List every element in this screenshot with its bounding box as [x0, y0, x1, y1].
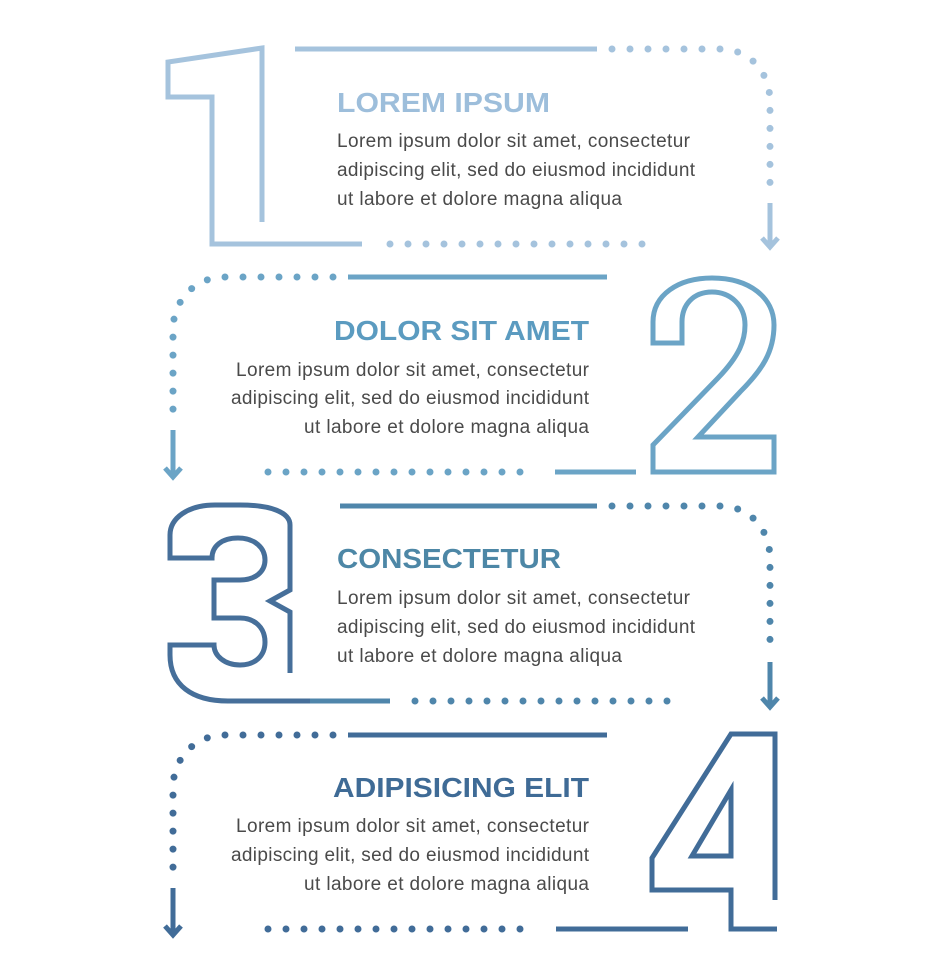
top line 2	[348, 274, 607, 280]
text 4	[231, 816, 590, 895]
bottom dots 3	[415, 698, 677, 704]
bottom dots 2	[268, 468, 530, 476]
number 2	[653, 278, 774, 472]
text 1	[337, 131, 696, 210]
dotted path with arrow 3	[612, 506, 778, 707]
text 4: Lorem ipsum dolor sit amet, consectetur	[236, 816, 590, 837]
text 4: ut labore et dolore magna aliqua	[304, 874, 589, 895]
text 1: Lorem ipsum dolor sit amet, consectetur	[337, 131, 691, 152]
bottom dots 4	[268, 926, 530, 932]
text 2: Lorem ipsum dolor sit amet, consectetur	[236, 360, 590, 381]
text 3	[337, 588, 696, 667]
title 1: LOREM IPSUM	[337, 87, 550, 118]
step 2	[165, 277, 774, 477]
bottom line 4	[556, 926, 688, 932]
dotted path with arrow 2	[165, 277, 333, 477]
step 4	[165, 734, 777, 935]
dotted path with arrow 1	[612, 49, 778, 247]
title 3: CONSECTETUR	[337, 543, 561, 574]
top line 4	[348, 732, 607, 738]
title 4: ADIPISICING ELIT	[333, 772, 589, 803]
text 4: adipiscing elit, sed do eiusmod incididunt	[231, 845, 590, 866]
text 3: ut labore et dolore magna aliqua	[337, 646, 622, 667]
bottom dots 1	[390, 240, 652, 248]
text 2: adipiscing elit, sed do eiusmod incididunt	[231, 388, 590, 409]
bottom line 3	[310, 698, 390, 704]
text 1: adipiscing elit, sed do eiusmod incididunt	[337, 160, 696, 181]
dotted path with arrow 4	[165, 735, 333, 935]
bottom line 2	[555, 470, 636, 474]
title 2: DOLOR SIT AMET	[334, 315, 589, 346]
text 2	[231, 360, 590, 438]
top line 3	[340, 504, 597, 508]
text 3: Lorem ipsum dolor sit amet, consectetur	[337, 588, 691, 609]
number 1	[168, 48, 362, 244]
text 3: adipiscing elit, sed do eiusmod incididunt	[337, 617, 696, 638]
number 3	[170, 505, 312, 701]
text 1: ut labore et dolore magna aliqua	[337, 189, 622, 210]
top line 1	[295, 46, 597, 52]
text 2: ut labore et dolore magna aliqua	[304, 417, 589, 438]
number 4	[652, 734, 777, 929]
step 3	[170, 505, 778, 707]
step 1	[168, 48, 778, 247]
